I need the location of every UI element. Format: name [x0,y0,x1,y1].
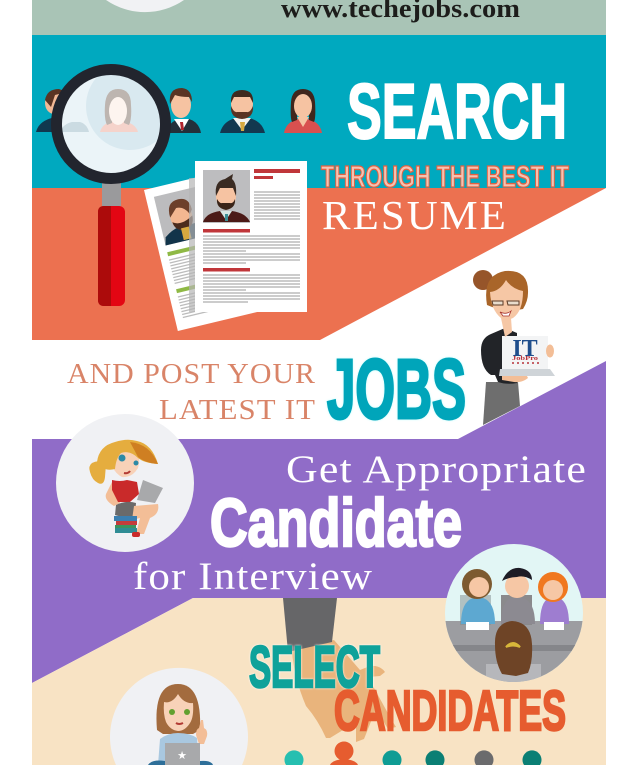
panel: purple candidate band [32,361,606,683]
panel: orange resume band [32,188,606,340]
icon: back resume page [144,165,280,331]
heading: jobs: JOBS [327,342,466,436]
icon: circle with brunette woman [110,668,248,765]
panel: cream selection band [32,598,606,765]
icon: person 4 [284,89,322,133]
icon: businesswoman with laptop: IT [512,336,538,362]
icon: person 3 [220,90,265,133]
icon: circle with interview panel [445,544,583,682]
icon: circle with brunette woman: ★ [177,750,187,762]
text: and post your: AND POST YOUR [67,358,316,390]
panel: teal search band [32,35,606,188]
icon: hand with grey sleeve [283,598,396,742]
heading: candidate: Candidate [210,485,462,561]
icon: person 2 [166,88,201,133]
heading: resume: RESUME [322,192,508,238]
icon: businesswoman with laptop [473,270,555,425]
heading: select: SELECT [249,635,380,700]
heading: get appropriate: Get Appropriate [286,448,587,491]
text: for interview: for Interview [133,555,373,598]
icon: circle with blonde woman [56,414,194,552]
icon: magnifying glass [51,62,174,306]
icon: front resume page [189,161,307,312]
icon: businesswoman with laptop: JobPro [512,356,538,362]
icon: person 1 [36,89,70,132]
text: latest it: LATEST IT [159,394,316,426]
panel: top website band [32,0,606,35]
icon: row of candidate figures [284,742,542,765]
